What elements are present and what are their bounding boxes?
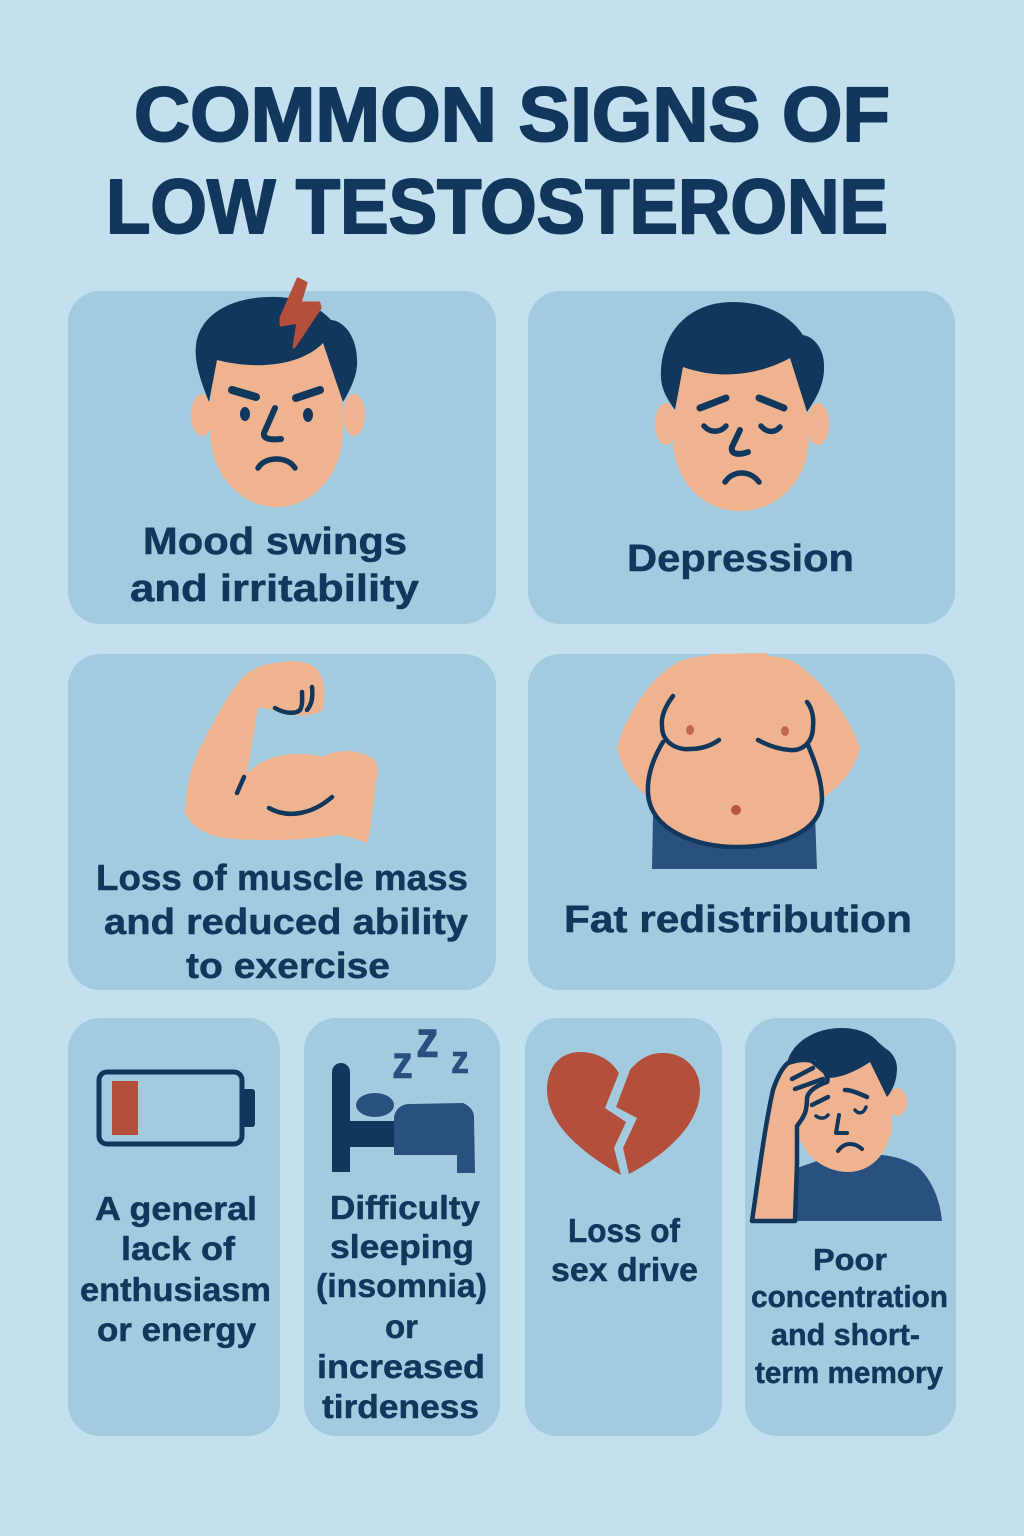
panel: poor concentration (745, 1018, 956, 1436)
panel: depression (528, 291, 955, 624)
text: lack of energy: or energy (97, 1311, 257, 1348)
icon: angry face (191, 279, 365, 507)
text: loss of sex drive: sex drive (551, 1251, 698, 1288)
text: sleep difficulty: (insomnia) (316, 1267, 487, 1304)
text: sleep difficulty (316, 1189, 487, 1425)
text: muscle loss: to exercise (186, 945, 390, 986)
panel: lack of energy (68, 1018, 280, 1436)
text: loss of sex drive (551, 1212, 698, 1288)
text: lack of energy: A general (95, 1190, 257, 1227)
panel: loss of sex drive (525, 1018, 722, 1436)
icon: person in bed with zzz: z (416, 1011, 439, 1069)
text: poor concentration: concentration (751, 1279, 948, 1314)
icon: person in bed with zzz: z (392, 1036, 413, 1088)
icon: person in bed with zzz: z (451, 1038, 469, 1082)
text: sleep difficulty: Difficulty (330, 1189, 481, 1226)
text: lack of energy: lack of (121, 1230, 236, 1267)
icon: sad face (655, 302, 829, 511)
panel: sleep difficulty (304, 1018, 500, 1436)
text: mood swings (130, 521, 419, 610)
text: sleep difficulty: sleeping (330, 1228, 474, 1265)
text: sleep difficulty: or (385, 1308, 418, 1345)
text: sleep difficulty: increased (317, 1348, 485, 1385)
icon: person in bed with zzz (332, 1011, 475, 1173)
icon: lightning bolt (281, 279, 320, 347)
text: mood swings: Mood swings (143, 521, 407, 563)
text: muscle loss: and reduced ability (104, 901, 468, 942)
text: depression: Depression (627, 538, 854, 580)
icon: worried person holding head (752, 1028, 942, 1221)
panel: mood swings (68, 291, 496, 624)
text: poor concentration: Poor (813, 1242, 887, 1277)
text: lack of energy (80, 1190, 271, 1348)
text: muscle loss: Loss of muscle mass (96, 857, 468, 898)
text: poor concentration: and short- (771, 1317, 920, 1352)
icon: low battery (99, 1072, 255, 1144)
text: sleep difficulty: tirdeness (322, 1388, 479, 1425)
text: poor concentration (751, 1242, 948, 1390)
text: loss of sex drive: Loss of (568, 1212, 681, 1249)
text: poor concentration: term memory (755, 1355, 944, 1390)
text: lack of energy: enthusiasm (80, 1271, 271, 1308)
icon: broken heart (547, 1052, 700, 1175)
title: COMMON SIGNS OF (134, 72, 890, 158)
text: fat redistribution: Fat redistribution (564, 899, 912, 941)
icon: torso with belly fat (617, 653, 860, 869)
panel: muscle loss (68, 654, 496, 990)
title: LOW TESTOSTERONE (106, 164, 888, 250)
icon: flexed arm (185, 661, 378, 843)
panel: fat redistribution (528, 654, 955, 990)
title (106, 72, 890, 250)
text: mood swings: and irritability (130, 568, 419, 610)
text: muscle loss (96, 857, 468, 986)
